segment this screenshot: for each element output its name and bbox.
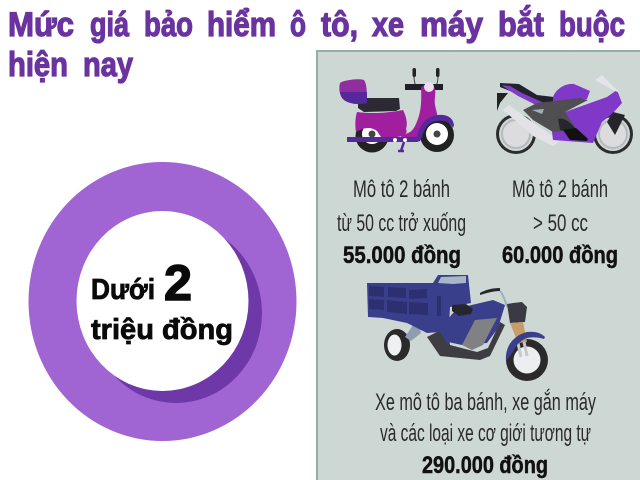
- title: máy: [420, 6, 483, 44]
- title: ô: [290, 6, 306, 44]
- label: three-wheeler: 290.000 đồng: [422, 452, 548, 479]
- ring label: Dưới: [91, 274, 155, 306]
- title: bảo: [144, 6, 193, 44]
- icon: sport motorbike: [496, 75, 633, 154]
- label: motorbike over 50 cc: 60.000 đồng: [502, 242, 618, 269]
- icon: scooter: [339, 68, 454, 152]
- title: buộc: [559, 6, 625, 44]
- label: scooter up to 50 cc: 55.000 đồng: [343, 242, 461, 269]
- title: nay: [83, 46, 133, 84]
- title: bắt: [498, 6, 544, 44]
- label: motorbike over 50 cc: [502, 176, 618, 269]
- ring label: 2: [164, 255, 192, 311]
- label: scooter up to 50 cc: [337, 176, 466, 269]
- title: hiện: [8, 46, 68, 84]
- title: hiểm: [207, 6, 276, 44]
- title: giá: [90, 6, 129, 44]
- title: xe: [372, 6, 404, 44]
- icon: three-wheeler: [367, 275, 548, 381]
- label: scooter up to 50 cc: Mô tô 2 bánh: [353, 176, 450, 203]
- title: [8, 6, 625, 84]
- panel: vehicle prices: [316, 50, 640, 480]
- label: three-wheeler: [375, 389, 596, 479]
- ring: under 2 million dong: [28, 162, 296, 441]
- title: Mức: [8, 6, 74, 44]
- label: motorbike over 50 cc: > 50 cc: [533, 210, 588, 237]
- ring label: triệu đồng: [91, 314, 233, 346]
- ring label: [91, 255, 233, 346]
- title: tô,: [321, 6, 358, 44]
- label: scooter up to 50 cc: từ 50 cc trở xuống: [337, 210, 466, 237]
